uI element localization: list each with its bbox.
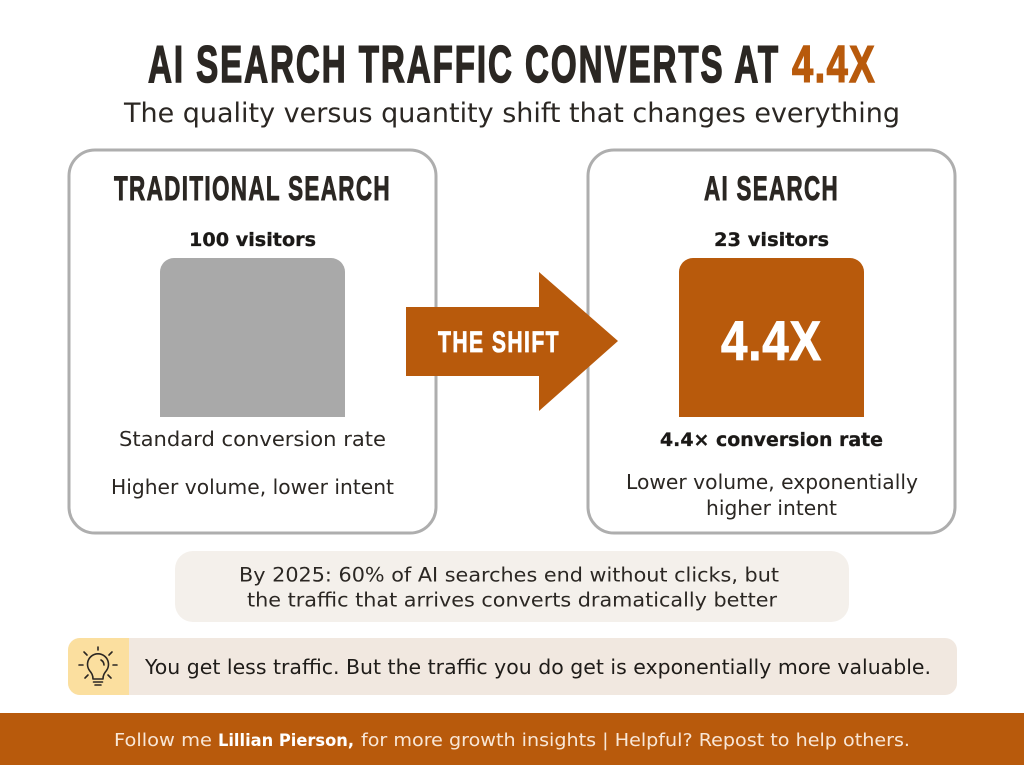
arrow: the shift: THE SHIFT [438, 326, 560, 359]
description: Higher volume, lower intent [111, 475, 394, 499]
takeaway text: You get less traffic. But the traffic you do get is exponentially more valuable. [144, 655, 931, 679]
callout: 2025 statistic: By 2025: 60% of AI searches end without clicks, but [239, 564, 779, 586]
footer: for more growth insights | Helpful? Repost to help others. [361, 730, 910, 751]
callout: 2025 statistic [175, 551, 849, 622]
conversion rate: Standard conversion rate [119, 427, 386, 451]
visitor count: 100 visitors [189, 229, 316, 251]
panel: AI search [588, 150, 955, 533]
footer: Follow me [114, 730, 212, 751]
footer [0, 713, 1024, 765]
panel: traditional search [69, 150, 436, 533]
key takeaway bar [68, 638, 957, 695]
title: 4.4X [792, 36, 876, 94]
conversion rate: 4.4× conversion rate [660, 429, 883, 451]
orange block with multiplier: 4.4X [721, 309, 822, 372]
description [626, 470, 918, 520]
icon: light bulb [68, 638, 129, 695]
footer: Lillian Pierson, [218, 731, 354, 751]
panel heading: AI SEARCH [704, 170, 839, 208]
visitor count: 23 visitors [714, 229, 829, 251]
description: higher intent [706, 496, 837, 520]
panel heading: TRADITIONAL SEARCH [114, 170, 391, 208]
description: Lower volume, exponentially [626, 470, 918, 494]
callout: 2025 statistic: the traffic that arrives converts dramatically better [247, 588, 778, 612]
orange block with multiplier [679, 258, 864, 417]
grey block [160, 258, 345, 417]
arrow: the shift [406, 272, 618, 411]
subtitle: The quality versus quantity shift that changes everything [123, 98, 900, 129]
